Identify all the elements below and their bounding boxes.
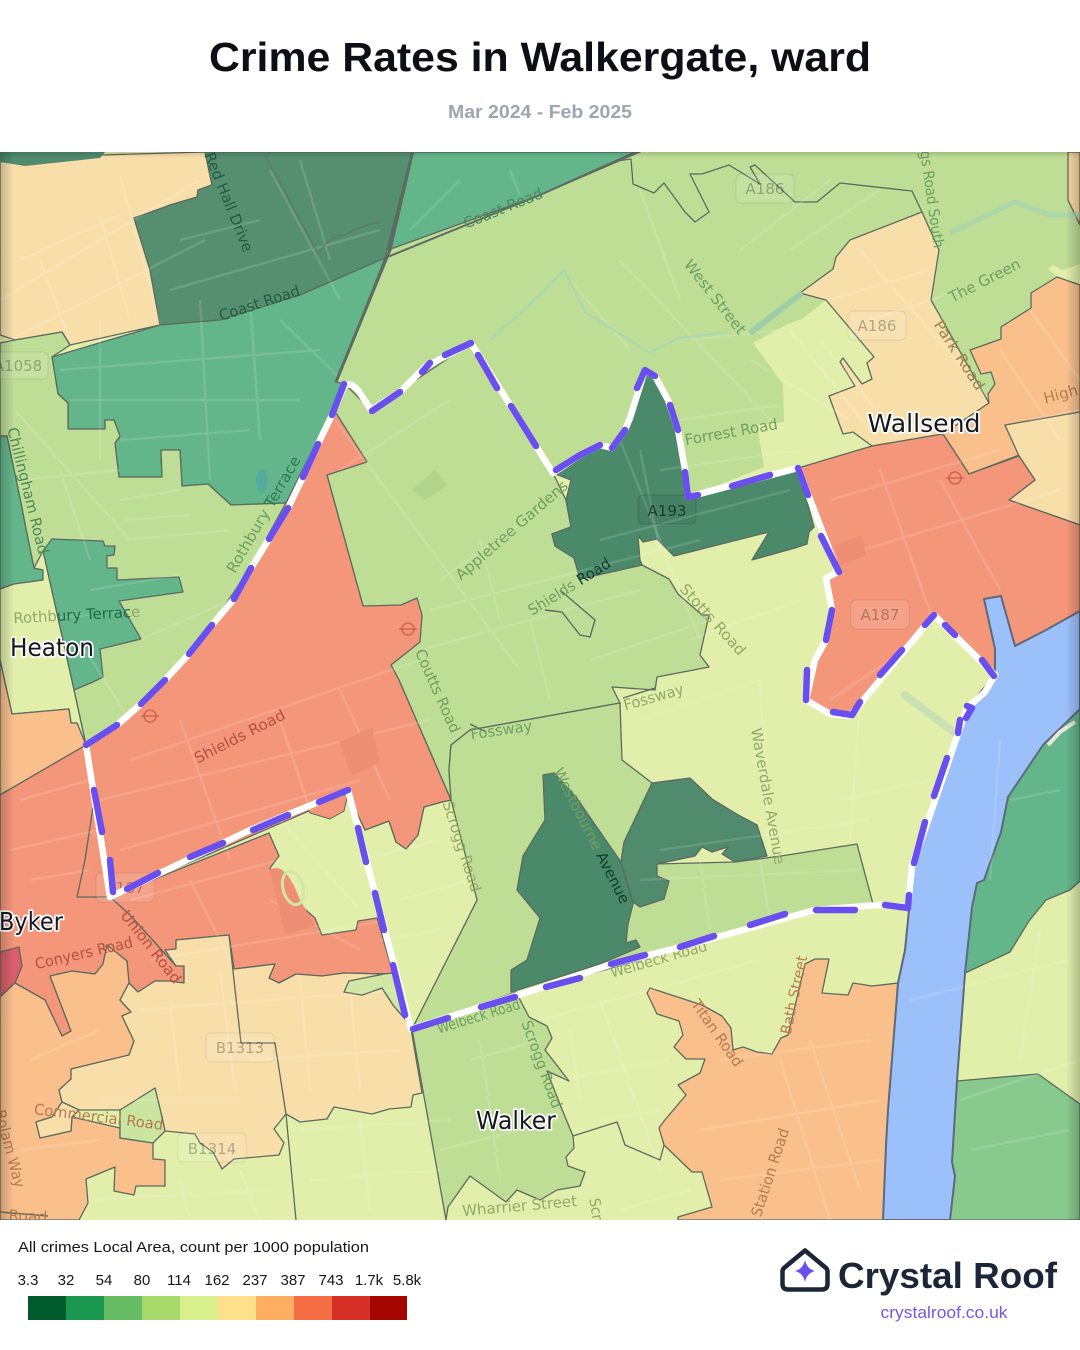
label: Westbourne Avenue: Westbourne Avenue [549,765,634,907]
label: The Green: The Green [945,255,1024,307]
label: Bath Street: Bath Street [777,954,811,1036]
label: Wharrier Street: Wharrier Street [461,1192,578,1220]
label: Fossway east: Fossway [621,680,686,714]
legend title: All crimes Local Area, count per 1000 population [18,1240,369,1256]
line: motorway north-south [336,150,413,382]
region: west orange [0,660,86,795]
region: Wallsend cream [800,212,989,446]
legend tick labels: 5.8k [393,1272,422,1289]
line: Coast Road east [385,150,640,258]
label: Wallsend: Wallsend [868,409,980,438]
label: Union Road: Union Road [117,907,185,987]
map edge shading [0,152,1080,1220]
station: Wallsend [946,472,964,484]
pond [256,469,268,493]
label: Red Hall Drive: Red Hall Drive [200,150,257,255]
title: Crime Rates in Walkergate, ward [209,34,871,80]
label: Forrest Road: Forrest Road [683,415,779,449]
label: Rothbury Terrace diagonal: Rothbury Terrace [223,453,304,576]
shield: A187 Byker [96,873,154,902]
Shields dark block [339,728,380,776]
label: Walker: Walker [476,1106,557,1135]
label: Welbeck Road west: Welbeck Road [435,995,522,1037]
region: central and east light green [412,703,873,1029]
region: north boundary line [610,159,922,222]
quay edge [1048,722,1075,745]
label: Coast Road east: Coast Road [461,184,545,232]
legend tick labels: 743 [318,1272,344,1289]
legend tick labels [18,1272,422,1289]
shield: B1314: B1314 [188,1140,236,1158]
label: Kings Road South: gs Road South [916,150,948,249]
label: Conyers Road: Conyers Road [33,933,135,973]
label: Shields Road south: Shields Road [191,706,288,767]
label: Fossway west: Fossway [469,717,533,743]
label: West Street: West Street [680,256,750,338]
shield: A186 Wallsend: A186 [858,317,896,335]
legend tick labels: 114 [167,1272,191,1289]
road shields [0,174,909,1162]
label: Park Road: Park Road [930,317,989,394]
region: Appletree light green [327,343,709,800]
line: inner Red Hall [265,155,380,254]
ward boundary: Walkergate [86,343,995,1029]
label: Shields Road north: Shields Road [525,554,614,619]
icon: house with sparkle [782,1250,828,1290]
green strip by river [905,695,955,733]
region: north light green [336,152,1080,497]
label: Waverdale Avenue: Waverdale Avenue [747,727,789,866]
region: Heaton pale [0,551,86,745]
decorative green patches [256,202,1080,935]
region boundary: Byker inner line [77,807,110,897]
legend colour bar [28,1296,407,1320]
region boundary: inner south line [229,935,296,1220]
region: Heaton light green [0,332,286,745]
label: Coast Road west: Coast Road [217,282,302,325]
shield: B1313 [206,1033,274,1062]
region: Byker small red [0,1018,5,1032]
boundary white casing [86,343,995,1029]
place labels [0,409,980,1135]
region: Byker south green patch [344,973,405,1019]
shield: A193 [638,495,696,524]
label: Coutts Road: Coutts Road [411,646,464,736]
street network [0,160,1080,1220]
label: High: High [1041,381,1080,407]
river Tyne [883,596,1080,1220]
park stream [490,270,729,353]
shield: A187 [851,600,909,629]
label: Scrogg Road south: Scrogg Road [518,1018,566,1111]
label: Byker: Byker [0,907,64,936]
shield: A1058 [0,352,48,379]
region: north-east mid green [388,152,640,250]
legend tick labels: 162 [204,1272,230,1289]
region: south-west orange [0,945,165,1220]
region: Walker south-east orange [647,959,898,1220]
station: Byker road [399,623,417,635]
Byker stadium [270,868,315,935]
legend tick labels: 387 [280,1272,306,1289]
river tributary [950,202,1080,233]
region: small salmon under border [305,794,348,819]
region: top-left green sliver [0,152,105,166]
label: Appletree Gardens: Appletree Gardens [452,476,572,584]
region: Red Hall dark green [134,152,412,325]
label: Stotts Road: Stotts Road [676,580,750,659]
region: Wallsend salmon [798,434,1080,716]
region: east cream [1005,412,1080,525]
label: Scrogg Road central: Scrogg Road [439,798,485,894]
line: Union Road [110,897,176,966]
shield: B1313: B1313 [216,1039,264,1057]
legend tick labels: 3.3 [18,1272,38,1289]
shield: B1314 [178,1133,246,1162]
line: Fossway [470,688,655,732]
shield: A187: A187 [861,606,899,624]
label: Commercial Road: Commercial Road [33,1100,164,1134]
canal strip [750,293,802,333]
region: Byker red [0,947,22,1000]
legend tick labels: 80 [134,1272,150,1289]
legend tick labels: 32 [58,1272,74,1289]
line: Bolam [0,1212,48,1216]
shield: A187 Byker: A187 [106,879,144,897]
region boundary: east of Walker [573,1122,664,1160]
street labels [0,150,1080,1226]
station: Byker [141,710,159,722]
label: Titan Road: Titan Road [687,995,747,1070]
region: Wallsend east orange [943,277,1080,474]
logo: Crystal Roof [782,1250,1058,1322]
tube station markers [141,472,964,722]
shield: A186 Wallsend [848,311,906,340]
region: Rothbury mid green [43,539,183,690]
Coast Road boundary [0,150,655,1216]
region: west mid green [52,258,385,505]
region: A193 dark green [552,370,814,579]
line: Shields Road detail [545,590,595,637]
label: Welbeck Road east: Welbeck Road [608,937,709,982]
boundary purple dashes [86,343,994,1029]
wordmark: Crystal Roof [838,1255,1058,1296]
region: south-west cream [59,935,422,1169]
region: west edge mid green [0,436,43,591]
region: Walker light green [412,992,585,1220]
legend [18,1240,422,1320]
map: crime rates choropleth [0,150,1080,1226]
region: Commercial Road cream patch [36,1102,79,1138]
label: Rothbury Terrace horizontal: Rothbury Terrace [13,603,141,627]
region: north-west cream [0,152,212,345]
region: Westbourne dark green [511,773,640,992]
legend tick labels: 1.7k [355,1272,384,1289]
region: east bank mid green [965,709,1080,973]
label: Station Road: Station Road [747,1126,793,1219]
region: Shields Road salmon [86,413,451,897]
region: Commercial Road green patch [120,1088,165,1143]
A187 dark block [835,535,866,566]
region: Waverdale dark green [621,778,767,907]
subtitle: date range: Mar 2024 - Feb 2025 [448,102,632,122]
legend tick labels: 54 [96,1272,112,1289]
building block [412,470,447,500]
shield: A186 north: A186 [746,180,784,198]
region: Byker salmon [0,745,393,1036]
label: Chillingham Road: Chillingham Road [3,426,52,556]
shield: A193: A193 [648,502,686,520]
shield: A186 north [736,174,794,203]
legend tick labels: 237 [242,1272,268,1289]
label: Heaton: Heaton [10,633,94,662]
region: east bank lower green [950,1074,1080,1220]
region: top-right corner cream [1068,152,1080,225]
label: Scrogg clipped: Scr [585,1197,607,1222]
website url: crystalroof.co.uk [880,1304,1008,1322]
region: Scrogg pale [358,800,478,1024]
